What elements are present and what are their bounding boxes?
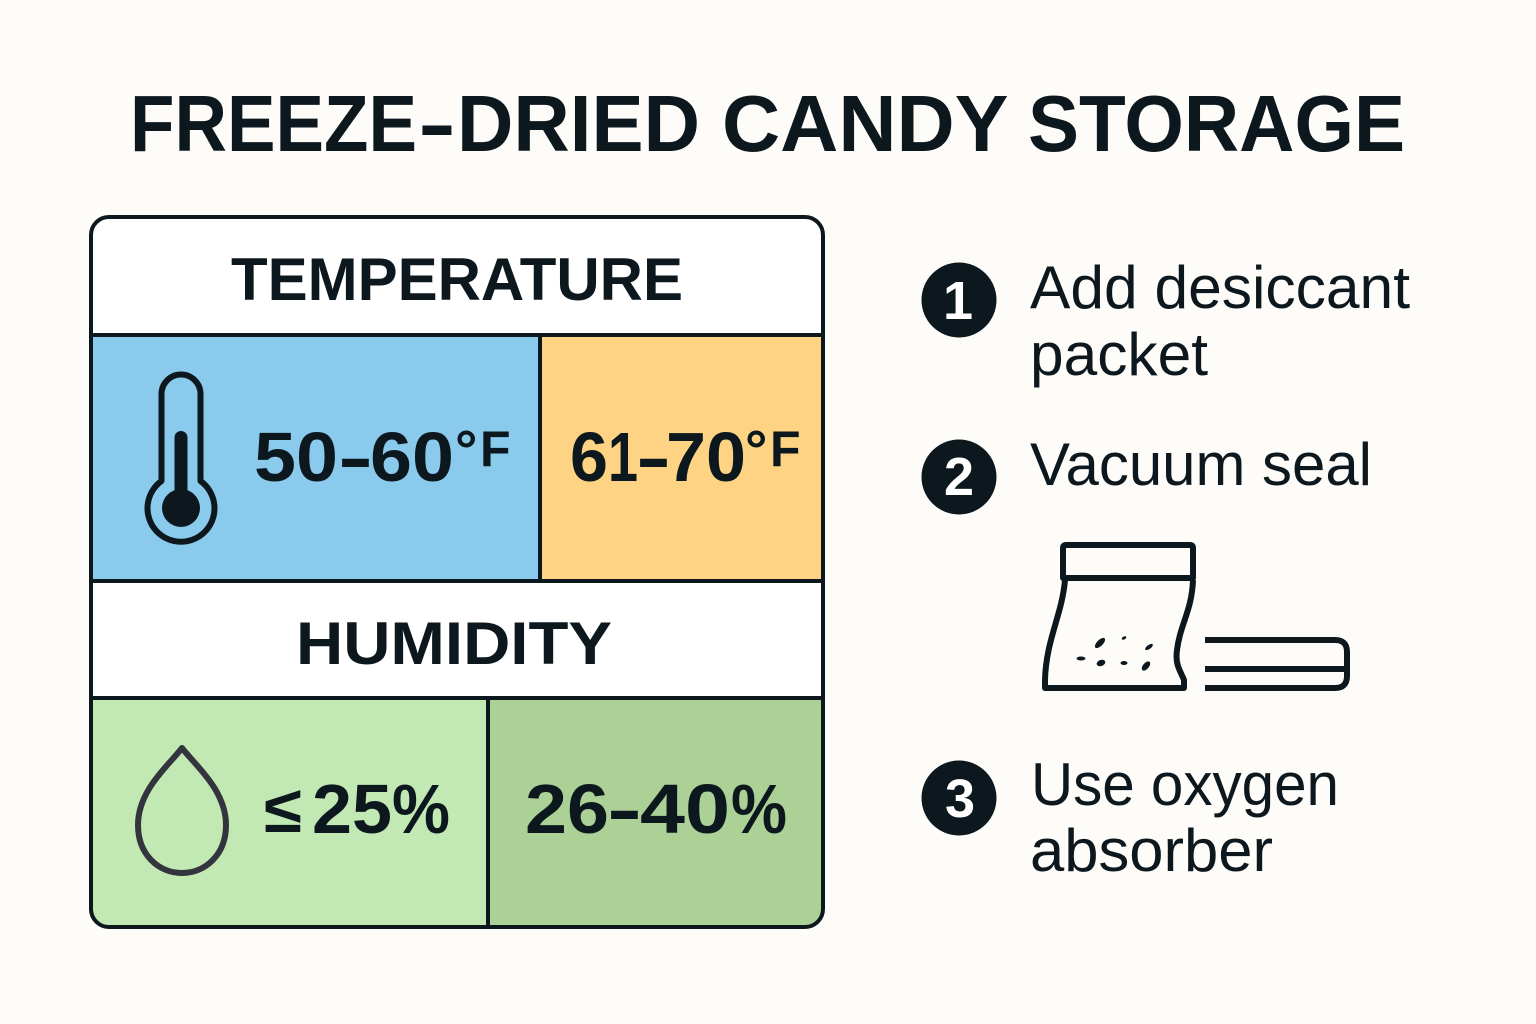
badge 2 [922, 440, 996, 514]
icon: thermometer [147, 374, 214, 542]
badge 1: 1 [943, 271, 973, 331]
table border [91, 217, 823, 927]
title: DRIED [457, 79, 700, 168]
value: 26-40%: % [731, 770, 787, 848]
value: 61-70F: F [770, 421, 801, 477]
step 2 [922, 431, 1372, 514]
value: 50-60F: 50 [254, 418, 338, 496]
value: up to 25%: % [392, 770, 450, 848]
value: 26-40%: 40 [640, 770, 730, 848]
title: - [418, 79, 456, 168]
value: 61-70F: ° [745, 418, 767, 481]
panel: storage table [91, 217, 823, 927]
icon: vacuum bag [1045, 545, 1347, 688]
heading: humidity: HUMIDITY [296, 610, 612, 677]
title: STORAGE [1028, 79, 1405, 168]
badge 1 [922, 262, 996, 338]
value: 26-40%: 26 [525, 770, 609, 848]
cell: 61-70F background [540, 336, 822, 581]
step 3 text: Use oxygen [1031, 751, 1339, 818]
icon: water drop [138, 748, 226, 873]
cell: 26-40% background [488, 698, 822, 926]
value: 61-70F: 6 [570, 418, 608, 496]
value: 50-60F [254, 418, 511, 496]
value: 61-70F: 1 [608, 418, 638, 496]
value: 61-70F: 70 [666, 418, 746, 496]
cell: 50-60F background [92, 336, 540, 581]
title: CANDY [722, 79, 1008, 168]
step 3 [922, 751, 1356, 884]
value: 50-60F: F [480, 421, 511, 477]
step 2 text: Vacuum seal [1030, 431, 1372, 498]
value: 61-70F [570, 418, 801, 496]
badge 2: 2 [944, 447, 974, 507]
cell: up to 25% background [92, 698, 488, 926]
step 1 text: packet [1030, 321, 1208, 388]
title: FREEZE [130, 79, 417, 168]
badge 3: 3 [945, 769, 975, 829]
value: up to 25% [264, 770, 450, 848]
value: 50-60F: - [338, 418, 373, 496]
step 1 [922, 254, 1427, 388]
step 3 text: absorber [1030, 817, 1273, 884]
value: up to 25%: ≤ [264, 772, 302, 846]
step 1 text: Add desiccant [1030, 254, 1410, 321]
value: 61-70F: - [636, 418, 671, 496]
value: 26-40%: - [607, 770, 642, 848]
heading: temperature: TEMPERATURE [231, 246, 683, 313]
value: 50-60F: ° [455, 418, 477, 481]
badge 3 [922, 760, 996, 836]
value: up to 25%: 25 [312, 770, 392, 848]
value: 50-60F: 60 [370, 418, 454, 496]
